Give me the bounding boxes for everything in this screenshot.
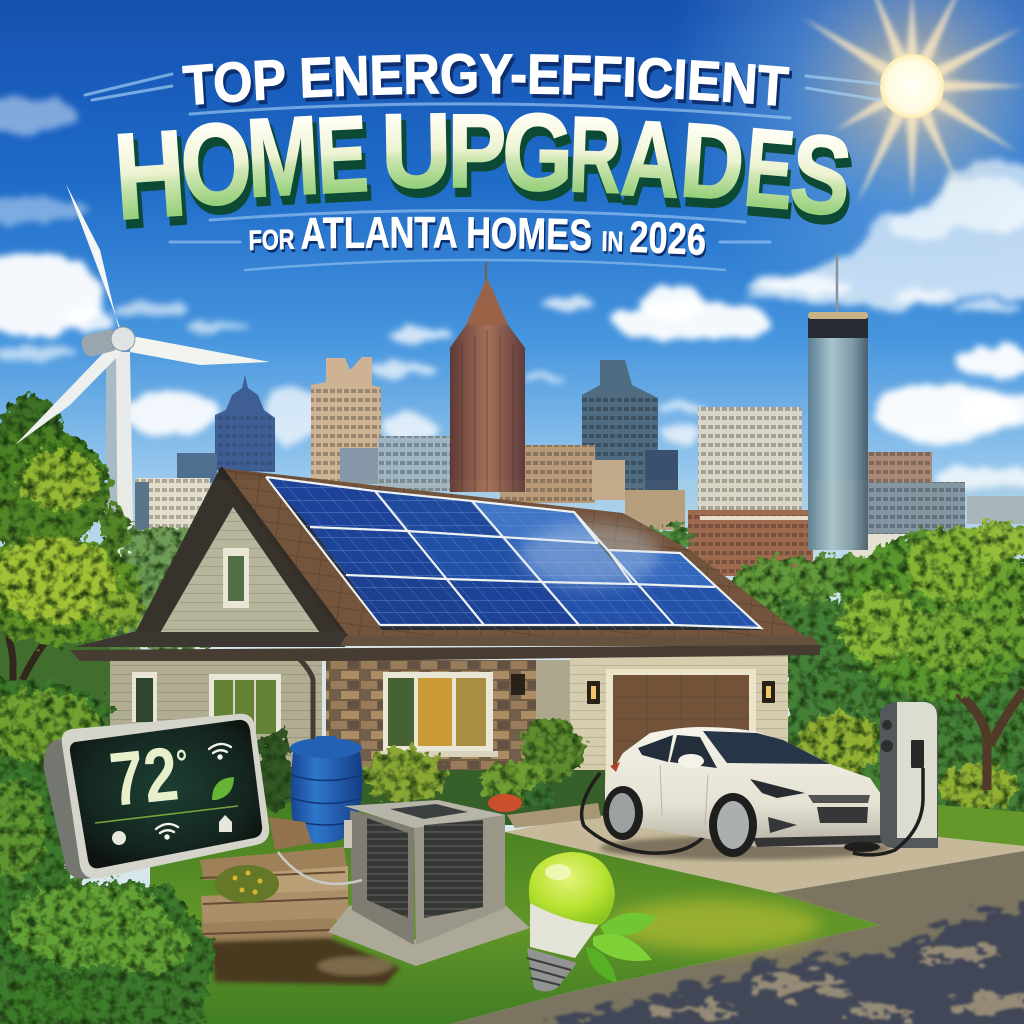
- planter edging: [507, 803, 601, 828]
- left windows: [132, 672, 281, 734]
- car lights, grille and bumper: [750, 779, 805, 798]
- stone steps: [200, 817, 348, 944]
- title: main heading: P: [451, 100, 510, 218]
- title: main heading: U: [380, 91, 453, 211]
- car windows: [638, 735, 717, 768]
- title: main heading: M: [247, 101, 326, 229]
- panel cells: [266, 477, 761, 630]
- road: [450, 851, 1024, 1024]
- lawn: [150, 800, 880, 1024]
- left tree: [0, 395, 145, 760]
- wind turbine hub and lower blade: [15, 327, 135, 445]
- title: main heading: M: [243, 93, 323, 221]
- title decorative streaks: [85, 74, 880, 270]
- clouds: [0, 97, 1024, 490]
- ground behind planting: [255, 770, 605, 825]
- title: main heading: E: [313, 93, 371, 218]
- thermostat leaf icon: [212, 777, 234, 800]
- fin grilles: [367, 818, 408, 918]
- title: main heading: H: [114, 111, 194, 254]
- front window: [380, 672, 498, 757]
- bulb glass: [529, 852, 615, 925]
- smart thermostat: [44, 714, 269, 879]
- title: main heading: D: [679, 108, 751, 231]
- panel frames: [266, 477, 761, 628]
- title: subheading: FOR ATLANTA HOMES IN 2026: [250, 216, 705, 256]
- lower eaves: [70, 632, 820, 661]
- title: main heading: O: [176, 97, 256, 232]
- car body: [605, 727, 888, 847]
- title: main heading: [110, 90, 860, 254]
- LED light bulb: [527, 852, 656, 992]
- title: main heading: E: [742, 113, 801, 242]
- title: main heading: A: [621, 106, 686, 229]
- title: main heading: R: [567, 95, 623, 216]
- thermostat temperature: °: [174, 741, 190, 783]
- solar panel array: [266, 477, 761, 630]
- main roof: [220, 468, 812, 642]
- title: main heading: G: [504, 98, 577, 223]
- title: main heading: P: [448, 92, 506, 210]
- downspout: [296, 655, 313, 770]
- warm light overlay: [0, 480, 1024, 1024]
- background trees: [50, 526, 1024, 820]
- yellow flowering bush: [215, 865, 279, 903]
- sun: [662, 0, 1024, 336]
- car charge cable: [582, 773, 707, 853]
- bulb base: [527, 948, 577, 992]
- title: main heading: U: [384, 99, 456, 218]
- front shrub: [0, 678, 215, 1024]
- EV charger: [853, 702, 938, 855]
- thermostat temperature: 72: [106, 731, 182, 822]
- air conditioner unit: [278, 800, 530, 966]
- title: main heading: H: [110, 103, 190, 246]
- garage door: [606, 669, 756, 790]
- car mirror: [678, 754, 704, 768]
- title: main heading: G: [501, 90, 574, 215]
- car ground shadow: [600, 836, 890, 860]
- thermostat home icon: [219, 815, 232, 832]
- gable: [133, 468, 345, 637]
- sun glare: [520, 523, 660, 587]
- title: main heading: E: [316, 101, 374, 225]
- spire tower: [450, 262, 525, 492]
- thermostat hand icon: [112, 831, 126, 845]
- car wheels: [603, 786, 880, 857]
- wall lanterns: [511, 674, 775, 704]
- mulch bed: [210, 938, 400, 985]
- sunlit lawn patch: [610, 899, 820, 951]
- title: main heading: E: [740, 104, 799, 234]
- bulb leaves: [586, 913, 656, 983]
- Atlanta skyline: [135, 255, 1024, 576]
- title: main heading: D: [677, 100, 748, 223]
- garden shrubs: [256, 720, 585, 814]
- right lawn strip: [938, 805, 1024, 846]
- title: main heading: S: [787, 118, 860, 249]
- driveway: [505, 815, 1024, 893]
- right tree: [838, 520, 1024, 790]
- house: [70, 468, 820, 790]
- thermostat divider: [95, 806, 238, 823]
- tree shadow on road: [530, 900, 1024, 1024]
- electric car: [582, 727, 890, 860]
- cylindrical tower: [808, 255, 868, 550]
- title: main heading: O: [180, 105, 260, 240]
- flowers: [488, 794, 522, 812]
- title: subheading: FOR ATLANTA HOMES IN 2026: [252, 220, 706, 258]
- title: main heading: R: [569, 103, 626, 224]
- title: main heading: S: [785, 110, 857, 240]
- car door lines: [660, 765, 708, 825]
- title: main heading: A: [618, 98, 684, 221]
- wind turbine tower and upper blades: [66, 184, 270, 582]
- rain barrel: [290, 736, 362, 843]
- bulb collar: [530, 903, 600, 958]
- distant buildings: [135, 357, 1024, 576]
- walls: [110, 655, 788, 790]
- thermostat wifi icon top: [209, 744, 231, 758]
- title: top line: TOP ENERGY-EFFICIENT: [185, 58, 792, 110]
- thermostat wifi icon bottom: [156, 824, 178, 838]
- title: top line: TOP ENERGY-EFFICIENT: [182, 53, 790, 106]
